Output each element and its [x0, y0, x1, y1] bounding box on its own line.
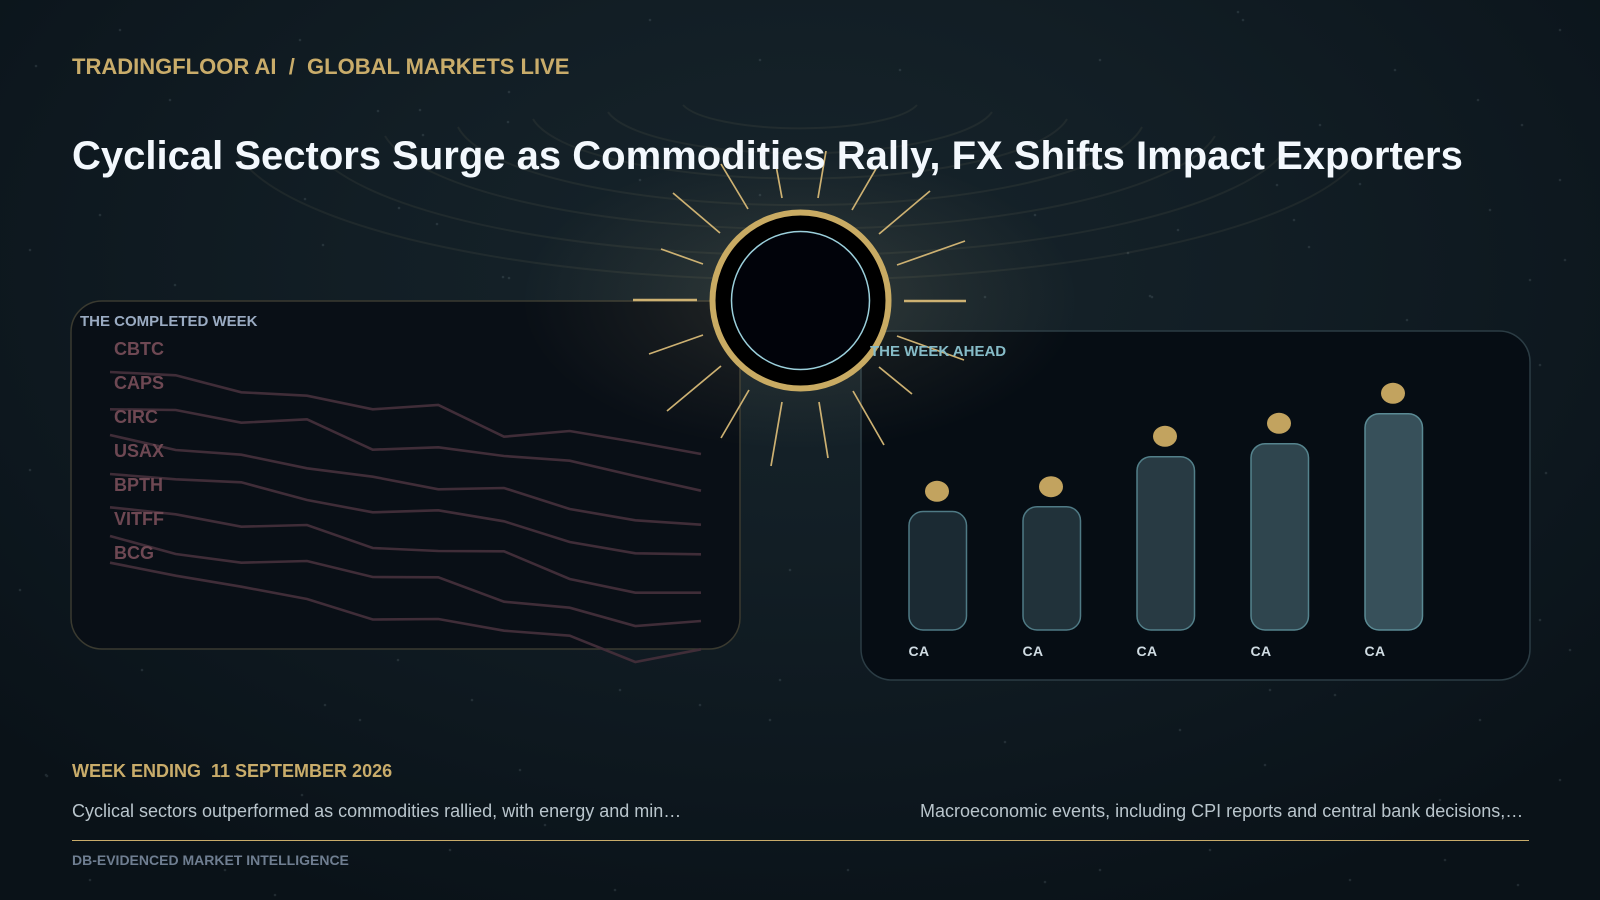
footer rule	[72, 840, 1529, 841]
title: Cyclical Sectors Surge as Commodities Rally, FX Shifts Impact Exporters	[72, 134, 1463, 178]
ticker labels: CBTC	[114, 339, 164, 359]
ticker labels: VITFF	[114, 509, 164, 529]
eclipse glow	[520, 150, 1080, 450]
sun rays	[633, 151, 966, 466]
panel: the completed week	[71, 301, 740, 662]
heading: the week ahead: THE WEEK AHEAD	[870, 343, 1006, 360]
bar 2: CA	[1022, 643, 1044, 659]
ticker labels: BCG	[114, 543, 154, 563]
bar 4	[1250, 413, 1308, 659]
ticker labels: CIRC	[114, 407, 158, 427]
bar 3: CA	[1136, 643, 1158, 659]
week ending label: WEEK ENDING 11 SEPTEMBER 2026	[72, 761, 392, 781]
line chart: completed week	[110, 372, 701, 662]
bar 3	[1136, 426, 1194, 659]
ticker labels: BPTH	[114, 475, 163, 495]
bar 5	[1364, 383, 1422, 659]
bar 4: CA	[1250, 643, 1272, 659]
ticker labels: CAPS	[114, 373, 164, 393]
summary: completed week: Cyclical sectors outperformed as commodities rallied, with energy and min…	[72, 801, 681, 821]
footer note: DB-EVIDENCED MARKET INTELLIGENCE	[72, 852, 349, 868]
concentric arcs	[238, 105, 1362, 280]
ticker labels	[114, 339, 164, 563]
brand header: TRADINGFLOOR AI / GLOBAL MARKETS LIVE	[72, 54, 569, 79]
bar 1	[908, 481, 966, 659]
heading: the completed week: THE COMPLETED WEEK	[80, 313, 258, 330]
bar 1: CA	[908, 643, 930, 659]
eclipse disc	[712, 212, 888, 388]
bar 2	[1022, 476, 1080, 659]
ticker labels: USAX	[114, 441, 164, 461]
bar 5: CA	[1364, 643, 1386, 659]
panel: the week ahead	[861, 331, 1530, 680]
summary: week ahead: Macroeconomic events, including CPI reports and central bank decisions,…	[920, 801, 1523, 821]
